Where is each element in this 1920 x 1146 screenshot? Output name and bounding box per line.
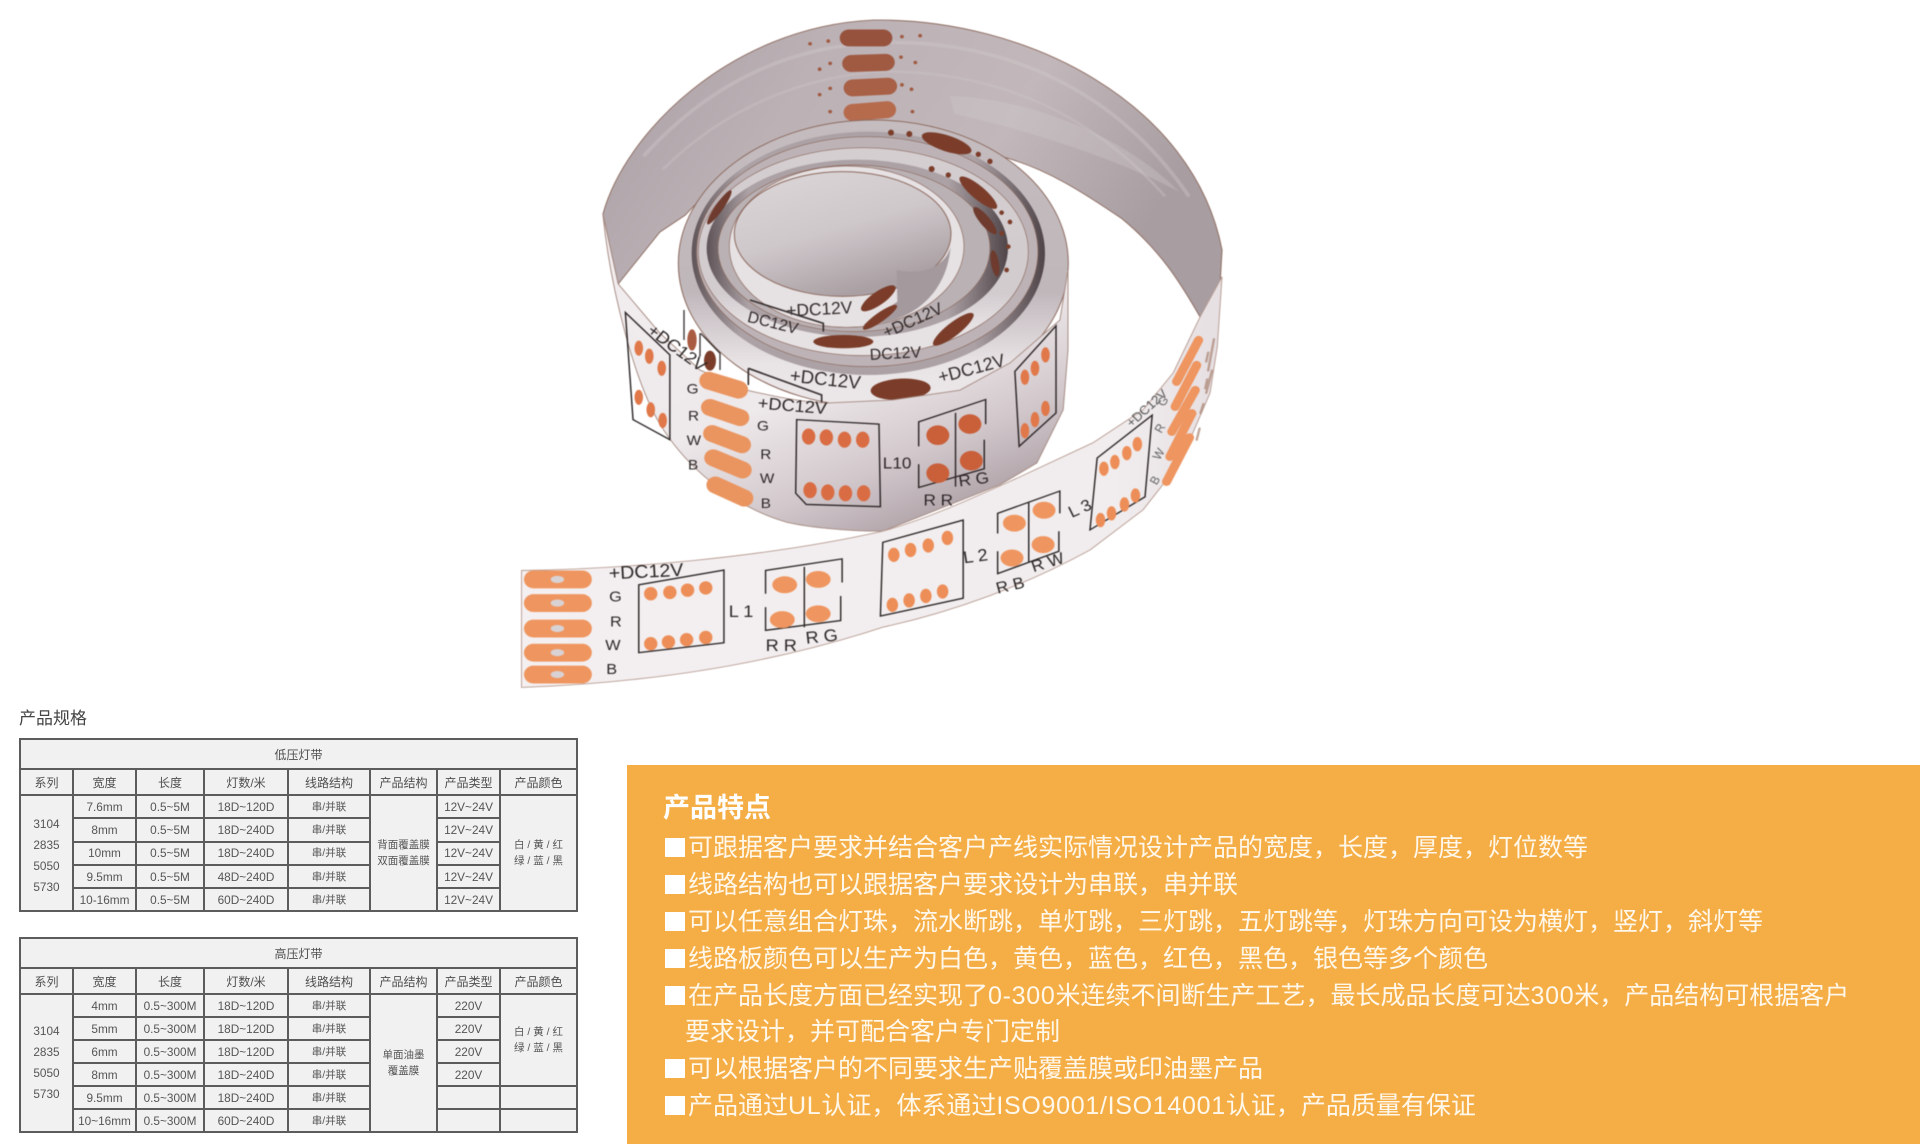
front band of outer loop: R R xyxy=(923,491,953,509)
strip tail in the foreground: +DC12V xyxy=(608,560,684,584)
table: low voltage strips: 白 / 黄 / 红 xyxy=(514,839,563,851)
table: high voltage strips: 产品类型 xyxy=(444,974,492,988)
table: high voltage strips: 0.5~300M xyxy=(144,1068,196,1082)
table: low voltage strips: 7.6mm xyxy=(86,800,123,814)
strip tail in the foreground: L 3 xyxy=(1065,496,1095,521)
front band of outer loop: W xyxy=(760,471,774,487)
strip tail in the foreground: R R xyxy=(766,635,797,655)
feature 1: 可跟据客户要求并结合客户产线实际情况设计产品的宽度，长度，厚度，灯位数等 xyxy=(688,834,1588,862)
table: low voltage strips: 5730 xyxy=(33,880,60,894)
front band of outer loop: G xyxy=(687,382,699,398)
table: high voltage strips: 串/并联 xyxy=(312,1022,346,1034)
strip tail in the foreground: L 1 xyxy=(729,601,753,621)
feature 6: 可以根据客户的不同要求生产贴覆盖膜或印油墨产品 xyxy=(688,1055,1263,1083)
table: high voltage strips: 单面油墨 xyxy=(382,1049,424,1061)
table: high voltage strips: 220V xyxy=(455,1044,482,1058)
front band of outer loop: R G xyxy=(957,468,990,490)
table: high voltage strips: 220V xyxy=(455,1022,482,1036)
table: low voltage strips: 背面覆盖膜 xyxy=(377,839,430,851)
table: low voltage strips: 12V~24V xyxy=(444,870,493,884)
panel: product features xyxy=(627,765,1920,1144)
table: high voltage strips: 5050 xyxy=(33,1066,60,1080)
heading: product specs: 产品规格 xyxy=(19,709,87,728)
table: low voltage strips: 10-16mm xyxy=(80,893,129,907)
front band of outer loop: B xyxy=(688,458,698,473)
table: low voltage strips: 9.5mm xyxy=(86,870,123,884)
table: high voltage strips: 串/并联 xyxy=(312,1000,346,1012)
inner coil xyxy=(678,120,1068,407)
strip tail in the foreground: R W xyxy=(1029,549,1067,576)
inner coil: +DC12V xyxy=(786,297,853,321)
table: high voltage strips: 6mm xyxy=(91,1044,118,1058)
table: high voltage strips: 10~16mm xyxy=(78,1114,131,1128)
illustration: coiled LED strip xyxy=(520,18,1224,688)
table: low voltage strips: 0.5~5M xyxy=(150,823,190,837)
table: high voltage strips: 线路结构 xyxy=(305,974,353,988)
inner coil: +DC12V xyxy=(789,365,862,393)
front band of outer loop: R xyxy=(688,409,699,424)
table: low voltage strips: 12V~24V xyxy=(444,800,493,814)
table: high voltage strips: 串/并联 xyxy=(312,1046,346,1058)
table: low voltage strips: 产品类型 xyxy=(444,776,492,790)
table: low voltage strips: 12V~24V xyxy=(444,846,493,860)
table: low voltage strips: 0.5~5M xyxy=(150,800,190,814)
table: low voltage strips: 系列 xyxy=(34,776,58,790)
strip tail in the foreground: R B xyxy=(994,573,1026,597)
table: high voltage strips: 4mm xyxy=(91,998,118,1012)
table: low voltage strips: 绿 / 蓝 / 黑 xyxy=(514,855,563,867)
back wall of outer loop xyxy=(603,20,1222,317)
front band of outer loop: +DC12V xyxy=(643,320,711,376)
table: high voltage strips: 0.5~300M xyxy=(144,1090,196,1104)
table: low voltage strips: 12V~24V xyxy=(444,823,493,837)
table: low voltage strips: 48D~240D xyxy=(218,870,274,884)
strip tail in the foreground: R xyxy=(610,614,622,631)
heading: features: 产品特点 xyxy=(663,793,771,823)
table: low voltage strips: 3104 xyxy=(33,817,60,831)
table: high voltage strips: 18D~240D xyxy=(218,1068,274,1082)
pads on back wall xyxy=(808,29,922,122)
table: low voltage strips: 18D~120D xyxy=(218,800,274,814)
front band of outer loop: G xyxy=(757,419,769,434)
table: low voltage strips: 0.5~5M xyxy=(150,846,190,860)
table: high voltage strips: 0.5~300M xyxy=(144,1114,196,1128)
table: high voltage strips: 串/并联 xyxy=(312,1092,346,1104)
table: high voltage strips xyxy=(19,937,578,1133)
feature 3: 可以任意组合灯珠，流水断跳，单灯跳，三灯跳，五灯跳等，灯珠方向可设为横灯，竖灯，斜灯等 xyxy=(688,908,1763,936)
strip tail in the foreground: G xyxy=(609,589,622,606)
table: low voltage strips: 双面覆盖膜 xyxy=(377,855,430,867)
table: high voltage strips: 0.5~300M xyxy=(144,1044,196,1058)
table: low voltage strips xyxy=(19,738,578,912)
table: low voltage strips: 18D~240D xyxy=(218,823,274,837)
table: low voltage strips: 串/并联 xyxy=(312,847,346,859)
inner coil: +DC12V xyxy=(936,350,1007,387)
front band of outer loop: +DC12V xyxy=(757,393,828,418)
table: high voltage strips: 220V xyxy=(455,998,482,1012)
table: high voltage strips: 8mm xyxy=(91,1068,118,1082)
table: high voltage strips: 9.5mm xyxy=(86,1090,123,1104)
table: low voltage strips: 串/并联 xyxy=(312,894,346,906)
table: low voltage strips: 5050 xyxy=(33,859,60,873)
table: high voltage strips: 5730 xyxy=(33,1087,60,1101)
strip tail in the foreground: R G xyxy=(805,625,839,648)
table: high voltage strips: 2835 xyxy=(33,1045,60,1059)
table: low voltage strips: 宽度 xyxy=(92,776,116,790)
inner coil: +DC12V xyxy=(880,298,946,342)
table: low voltage strips: 低压灯带 xyxy=(274,748,323,762)
strip tail in the foreground: +DC12V xyxy=(1123,386,1171,430)
table: low voltage strips: 产品结构 xyxy=(379,776,428,790)
bullet 7 xyxy=(665,1096,685,1115)
table: high voltage strips: 0.5~300M xyxy=(144,998,196,1012)
table: low voltage strips: 产品颜色 xyxy=(514,776,563,790)
table: high voltage strips: 串/并联 xyxy=(312,1068,346,1080)
feature 5 continued: 要求设计，并可配合客户专门定制 xyxy=(685,1018,1060,1046)
table: high voltage strips: 3104 xyxy=(33,1024,60,1038)
feature 2: 线路结构也可以跟据客户要求设计为串联，串并联 xyxy=(688,871,1238,899)
table: high voltage strips: 220V xyxy=(455,1068,482,1082)
strip tail in the foreground: B xyxy=(1147,474,1163,487)
bullet 4 xyxy=(665,949,685,968)
table: high voltage strips: 60D~240D xyxy=(218,1114,274,1128)
front band of outer loop: W xyxy=(687,433,701,449)
table: high voltage strips: 0.5~300M xyxy=(144,1022,196,1036)
table: high voltage strips: 高压灯带 xyxy=(274,947,323,961)
inner coil: DC12V xyxy=(746,309,800,338)
table: high voltage strips: 串/并联 xyxy=(312,1114,346,1126)
inner coil: DC12V xyxy=(869,344,922,364)
strip tail in the foreground: B xyxy=(606,662,617,678)
bullet 3 xyxy=(665,912,685,931)
table: low voltage strips: 串/并联 xyxy=(312,871,346,883)
table: low voltage strips: 10mm xyxy=(88,846,121,860)
front band of outer loop: B xyxy=(761,496,771,512)
bullet 5 xyxy=(665,986,685,1005)
table: high voltage strips: 5mm xyxy=(91,1022,118,1036)
table: high voltage strips: 白 / 黄 / 红 xyxy=(514,1026,563,1038)
table: low voltage strips: 8mm xyxy=(91,823,118,837)
table: high voltage strips: 18D~240D xyxy=(218,1090,274,1104)
strip tail in the foreground: R xyxy=(1151,421,1169,435)
table: high voltage strips: 绿 / 蓝 / 黑 xyxy=(514,1042,563,1054)
table: low voltage strips: 60D~240D xyxy=(218,893,274,907)
strip tail in the foreground: L 2 xyxy=(962,545,989,567)
strip tail in the foreground: W xyxy=(1150,445,1168,462)
table: high voltage strips: 覆盖膜 xyxy=(388,1065,419,1077)
table: high voltage strips: 产品结构 xyxy=(379,974,428,988)
table: low voltage strips: 串/并联 xyxy=(312,824,346,836)
table: high voltage strips: 灯数/米 xyxy=(226,974,266,988)
bullet 6 xyxy=(665,1059,685,1078)
front band of outer loop: L10 xyxy=(883,454,912,473)
table: low voltage strips: 0.5~5M xyxy=(150,893,190,907)
strip tail in the foreground: G xyxy=(1154,394,1172,409)
table: high voltage strips: 18D~120D xyxy=(218,998,274,1012)
front band of outer loop: R xyxy=(760,447,771,463)
strip tail in the foreground xyxy=(522,277,1222,687)
bullet 1 xyxy=(665,838,685,857)
table: low voltage strips: 灯数/米 xyxy=(226,776,266,790)
bullet 2 xyxy=(665,875,685,894)
feature 7: 产品通过UL认证，体系通过ISO9001/ISO14001认证，产品质量有保证 xyxy=(688,1092,1476,1120)
strip tail in the foreground: W xyxy=(605,637,621,654)
table: high voltage strips: 产品颜色 xyxy=(514,974,563,988)
table: low voltage strips: 长度 xyxy=(158,776,182,790)
table: low voltage strips: 18D~240D xyxy=(218,846,274,860)
feature 4: 线路板颜色可以生产为白色，黄色，蓝色，红色，黑色，银色等多个颜色 xyxy=(688,945,1488,973)
table: high voltage strips: 系列 xyxy=(34,974,58,988)
table: low voltage strips: 2835 xyxy=(33,838,60,852)
table: high voltage strips: 长度 xyxy=(158,974,182,988)
table: low voltage strips: 12V~24V xyxy=(444,893,493,907)
table: high voltage strips: 18D~120D xyxy=(218,1044,274,1058)
table: low voltage strips: 串/并联 xyxy=(312,801,346,813)
table: high voltage strips: 宽度 xyxy=(92,974,116,988)
table: low voltage strips: 0.5~5M xyxy=(150,870,190,884)
feature 5: 在产品长度方面已经实现了0-300米连续不间断生产工艺，最长成品长度可达300米，产品结构可根据客户 xyxy=(688,982,1849,1010)
table: low voltage strips: 线路结构 xyxy=(305,776,353,790)
table: high voltage strips: 18D~120D xyxy=(218,1022,274,1036)
front band of outer loop xyxy=(603,214,1068,531)
